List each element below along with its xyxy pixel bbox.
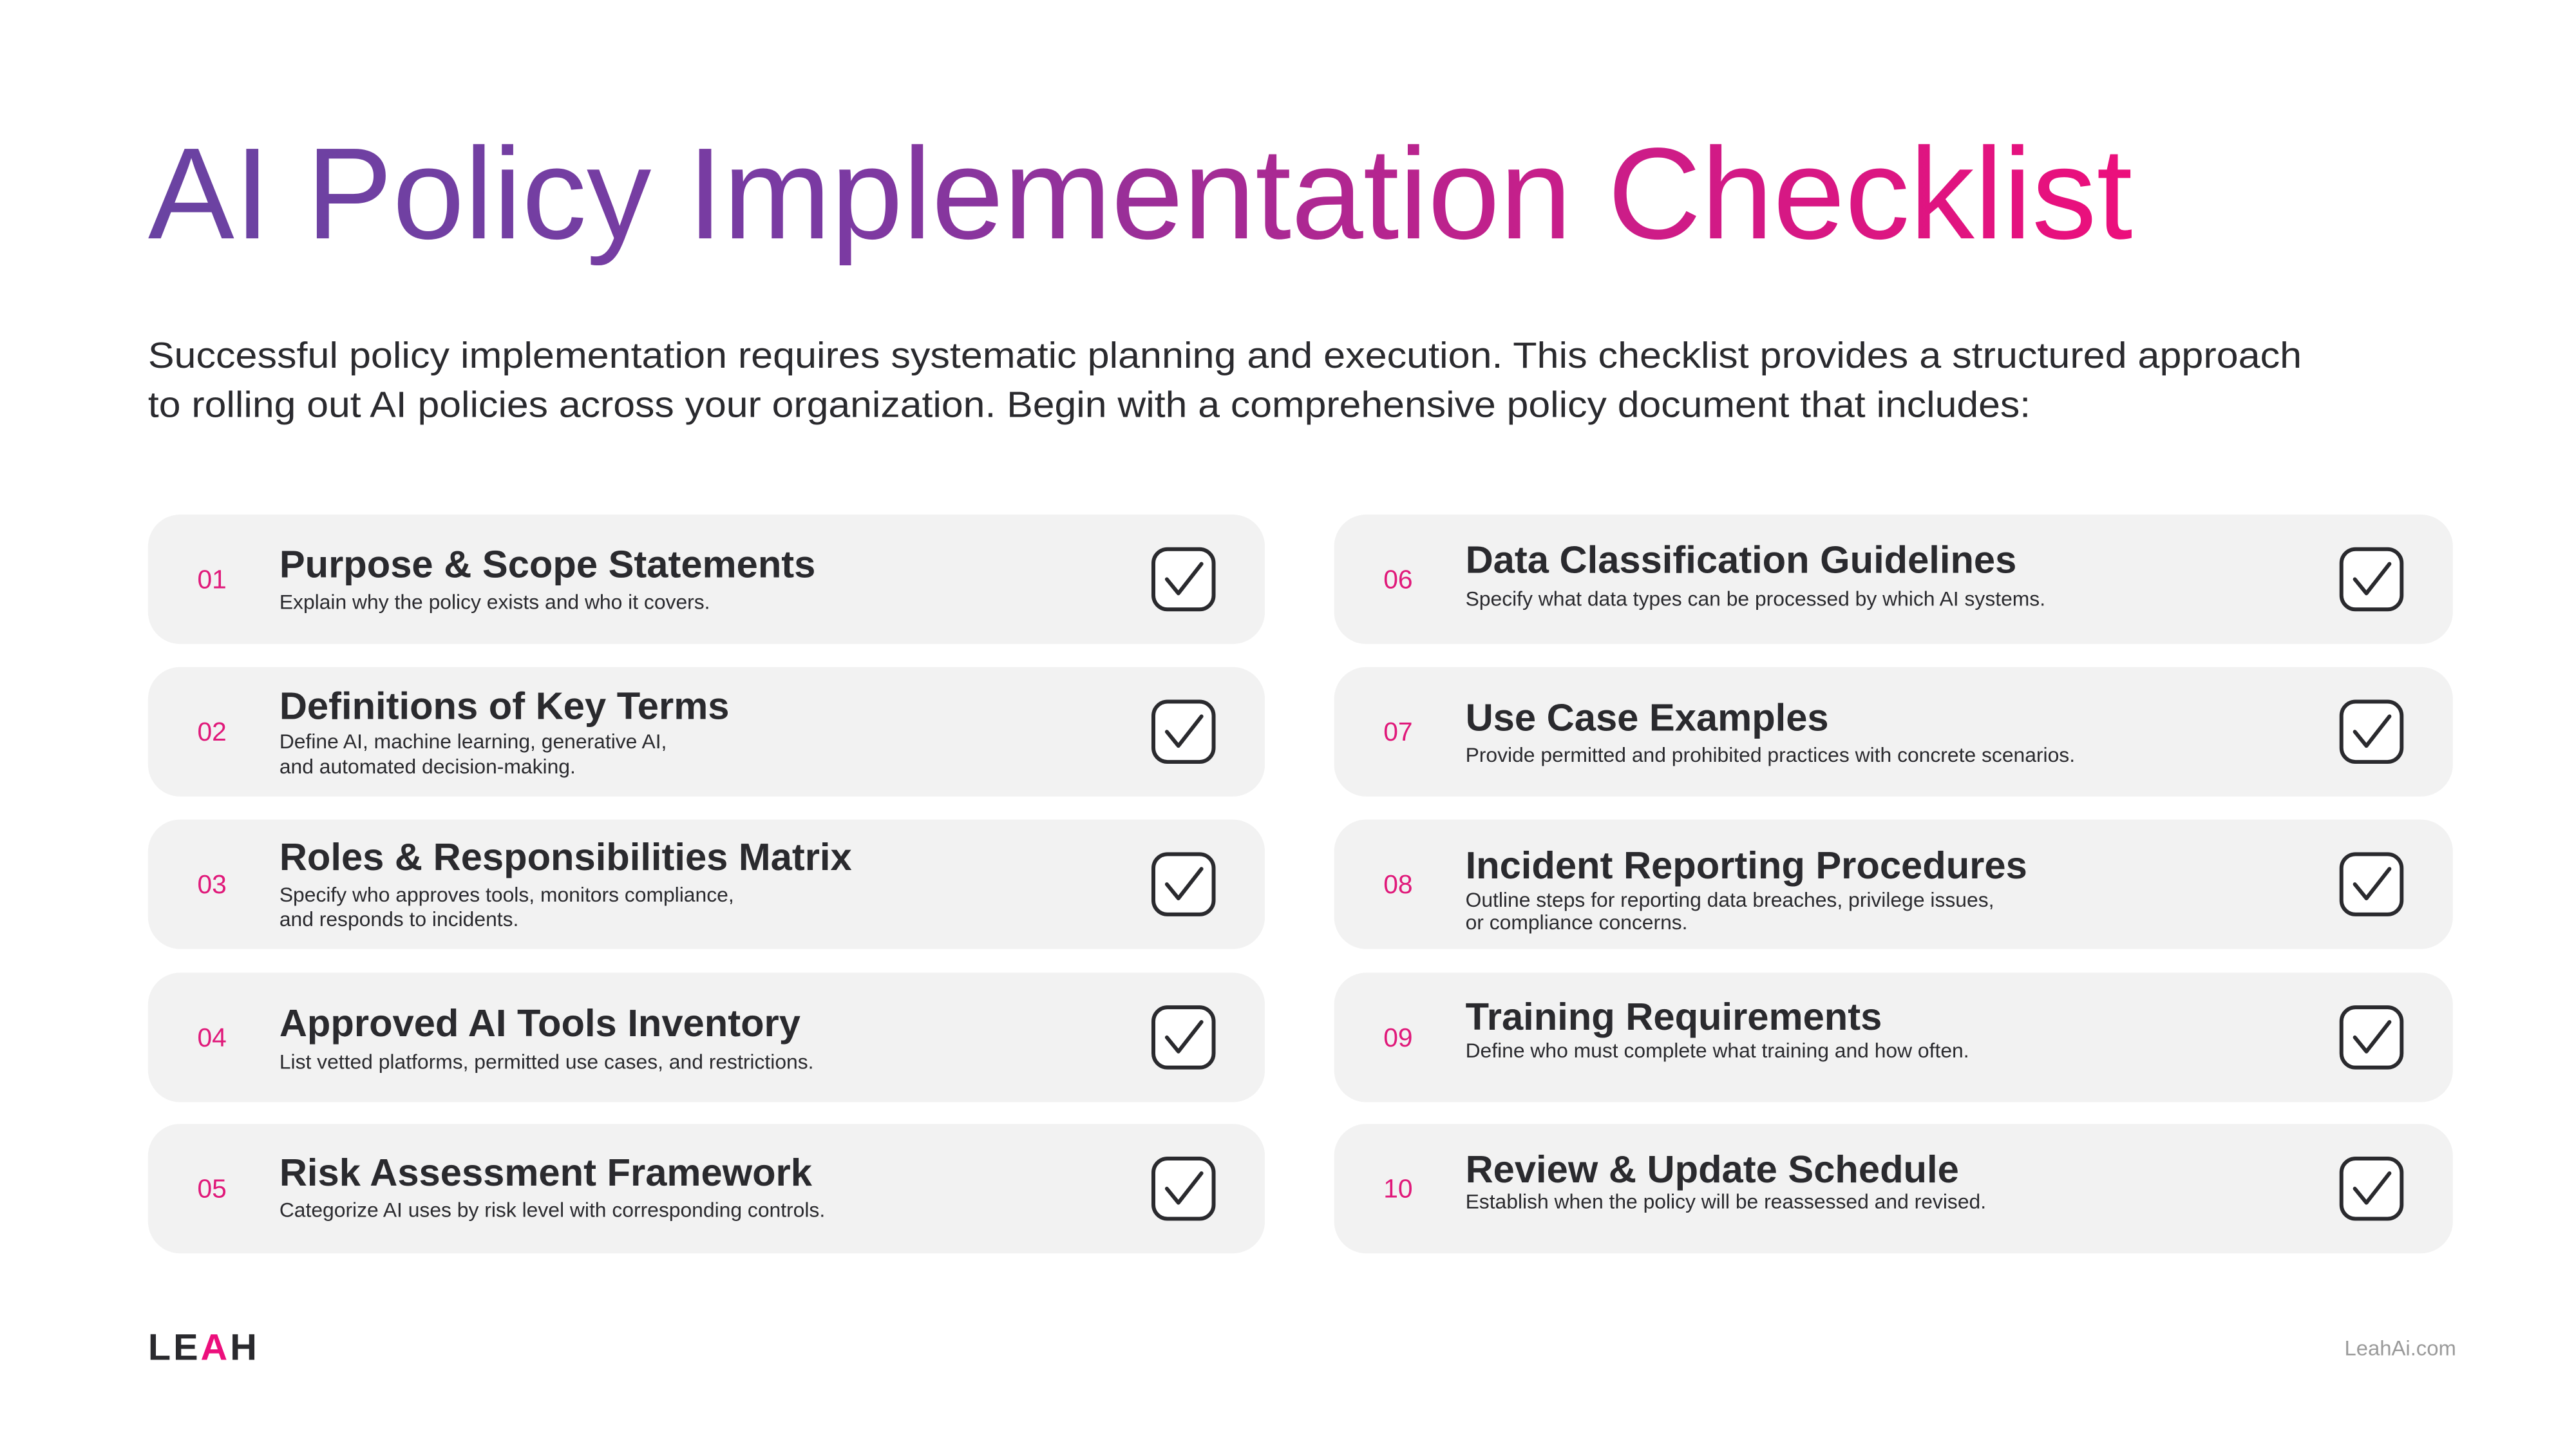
- card 06: 06: [1383, 564, 1413, 594]
- card 07: [1334, 667, 2453, 797]
- card 01: Explain why the policy exists and who it covers.: [279, 590, 710, 613]
- card 04: [148, 972, 1265, 1102]
- icon: checkbox: [1153, 1159, 1214, 1218]
- icon: checkbox: [2342, 1007, 2401, 1068]
- card 03: [148, 820, 1265, 949]
- card 03: and responds to incidents.: [279, 907, 518, 931]
- card 08: Incident Reporting Procedures: [1466, 844, 2027, 887]
- card 02: 02: [197, 717, 227, 746]
- intro paragraph: Successful policy implementation requires systematic planning and execution. This checklist provides a structured approach: [148, 336, 2302, 376]
- card 02: [148, 667, 1265, 797]
- card 10: Establish when the policy will be reassessed and revised.: [1466, 1190, 1986, 1213]
- logo: LEAH: LEAH: [148, 1327, 260, 1368]
- card 10: Review & Update Schedule: [1466, 1148, 1959, 1191]
- card 07: Provide permitted and prohibited practices with concrete scenarios.: [1466, 743, 2075, 766]
- card 05: Risk Assessment Framework: [279, 1151, 813, 1194]
- card 08: Outline steps for reporting data breaches, privilege issues,: [1466, 888, 1994, 911]
- footer url: LeahAi.com: [2344, 1336, 2456, 1359]
- card 05: 05: [197, 1174, 227, 1204]
- title: AI Policy Implementation Checklist: [148, 120, 2132, 266]
- icon: checkbox: [1153, 854, 1214, 914]
- card 08: or compliance concerns.: [1466, 911, 1688, 934]
- icon: checkbox: [2342, 854, 2401, 914]
- icon: checkbox: [1153, 702, 1214, 762]
- card 09: 09: [1383, 1023, 1413, 1052]
- card 02: and automated decision-making.: [279, 755, 576, 778]
- card 04: Approved AI Tools Inventory: [279, 1001, 800, 1045]
- card 06: Specify what data types can be processed by which AI systems.: [1466, 587, 2045, 610]
- card 10: [1334, 1124, 2453, 1253]
- card 10: 10: [1383, 1174, 1413, 1204]
- card 07: 07: [1383, 717, 1413, 746]
- icon: checkbox: [2342, 1159, 2401, 1218]
- card 05: [148, 1124, 1265, 1253]
- card 02: Define AI, machine learning, generative AI,: [279, 730, 667, 753]
- card 01: [148, 515, 1265, 644]
- card 07: Use Case Examples: [1466, 696, 1829, 739]
- card 05: Categorize AI uses by risk level with corresponding controls.: [279, 1198, 825, 1222]
- card 01: Purpose & Scope Statements: [279, 542, 815, 585]
- card 08: [1334, 820, 2453, 949]
- icon: checkbox: [2342, 702, 2401, 762]
- card 08: 08: [1383, 869, 1413, 899]
- icon: checkbox: [1153, 1007, 1214, 1068]
- card 03: Specify who approves tools, monitors compliance,: [279, 883, 734, 906]
- intro paragraph: to rolling out AI policies across your organization. Begin with a comprehensive policy document that includes:: [148, 385, 2031, 426]
- icon: checkbox: [1153, 549, 1214, 609]
- card 04: List vetted platforms, permitted use cases, and restrictions.: [279, 1050, 813, 1074]
- card 06: Data Classification Guidelines: [1466, 538, 2016, 582]
- card 06: [1334, 515, 2453, 644]
- card 01: 01: [197, 564, 227, 594]
- card 04: 04: [197, 1023, 227, 1052]
- card 02: Definitions of Key Terms: [279, 684, 730, 727]
- card 09: [1334, 972, 2453, 1102]
- icon: checkbox: [2342, 549, 2401, 609]
- card 09: Training Requirements: [1466, 995, 1882, 1038]
- intro paragraph: [148, 336, 2302, 426]
- card 03: 03: [197, 869, 227, 899]
- card 03: Roles & Responsibilities Matrix: [279, 835, 852, 878]
- card 09: Define who must complete what training and how often.: [1466, 1039, 1969, 1062]
